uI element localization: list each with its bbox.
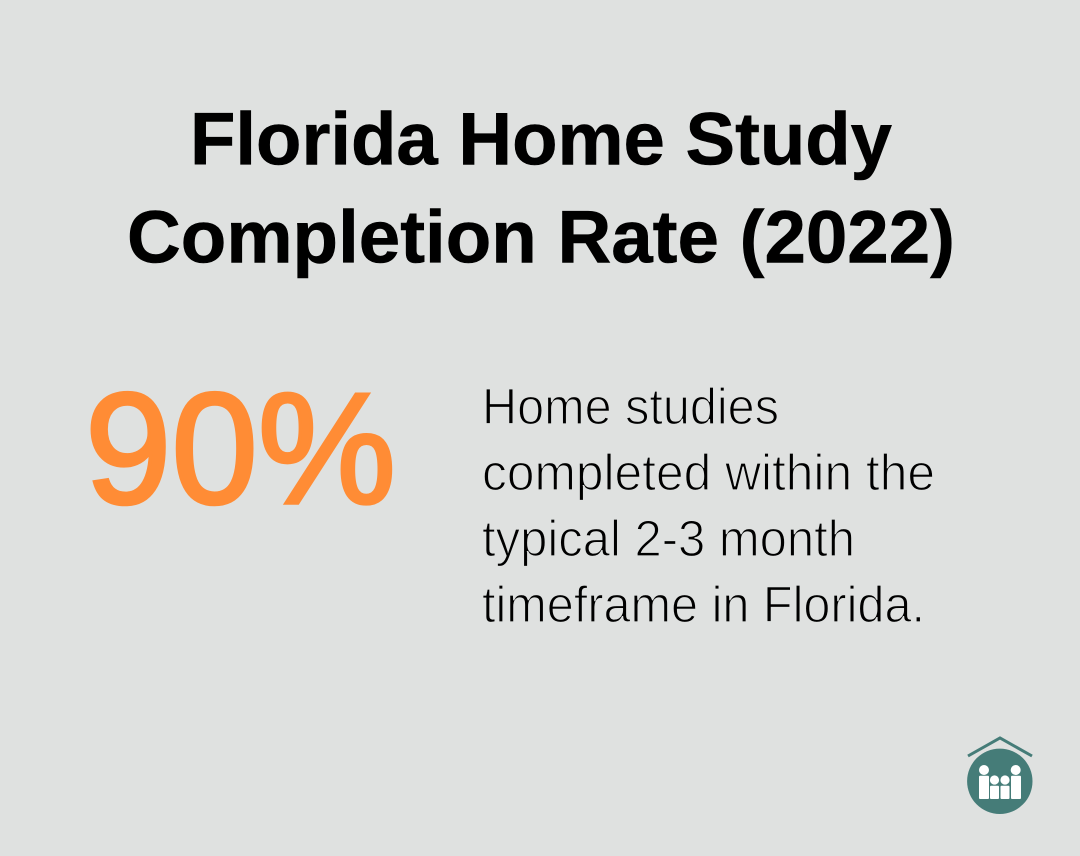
description text: completed within the — [482, 444, 935, 501]
description text: Home studies — [482, 378, 779, 435]
title: Florida Home Study — [190, 98, 892, 180]
description text: typical 2-3 month — [482, 510, 855, 567]
icon: logo with house roof and family — [967, 738, 1032, 814]
title — [127, 98, 955, 278]
description text — [482, 378, 935, 633]
title: Completion Rate (2022) — [127, 196, 955, 278]
big stat: 90%: 90% — [85, 361, 396, 537]
description text: timeframe in Florida. — [482, 576, 925, 633]
